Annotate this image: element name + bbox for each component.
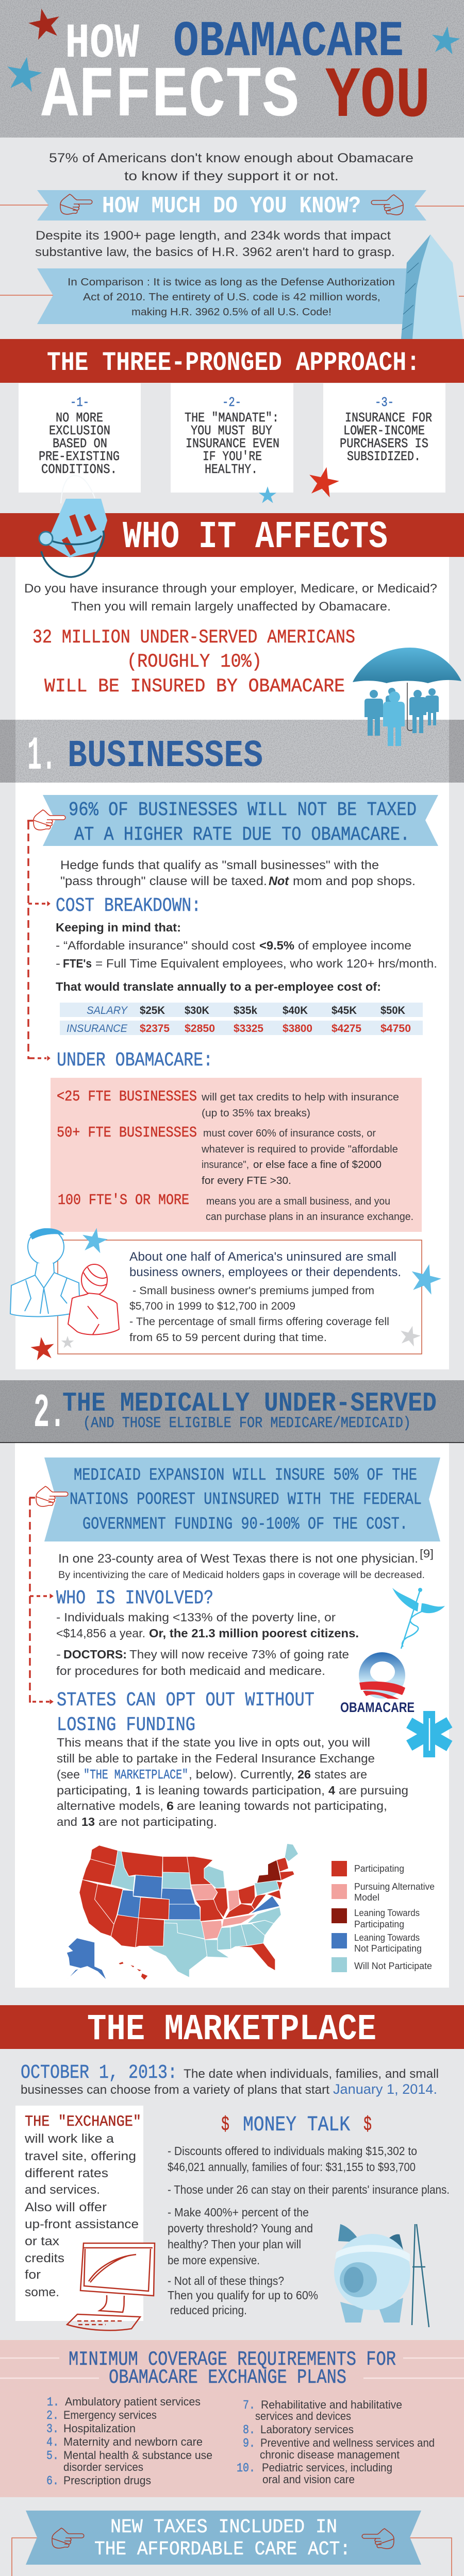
text block: who is involved: <$14,856 a year. (56, 1626, 145, 1640)
heading: money talk: $ (363, 2114, 372, 2137)
callout: 32 million (32, 627, 355, 698)
table: salary and insurance cost: $50K (380, 1005, 405, 1016)
table: salary and insurance cost: $2375 (140, 1023, 170, 1035)
heading: states can opt out: LOSING FUNDING (57, 1714, 195, 1736)
text block: who is involved: - Individuals making <133% of the poverty line, or (56, 1611, 336, 1624)
list: coverage left column: Ambulatory patient services (65, 2395, 201, 2408)
legend: map states: Leaning Towards (354, 1908, 420, 1918)
icon: sketch of businesswoman (68, 1264, 119, 1334)
icon: blue star (80, 1226, 109, 1254)
panel: prong 2 (171, 383, 293, 493)
legend: map states: Leaning Towards (354, 1933, 420, 1943)
list: coverage left column: 2. (46, 2409, 59, 2423)
text block: opt out details: 13 (81, 1815, 95, 1828)
panel: prong 3: LOWER-INCOME (343, 423, 425, 438)
icon: red star (29, 1335, 56, 1361)
band: the marketplace (0, 2005, 464, 2050)
panel: FTE rules: will get tax credits to help with insurance (201, 1092, 399, 1103)
callout: 32 million: (ROUGHLY 10%) (127, 651, 262, 673)
list: coverage right column: Pediatric services, including (262, 2461, 392, 2474)
panel: minimum coverage requirements (0, 2340, 464, 2497)
gray section: medically under-served heading: (AND THOSE ELIGIBLE FOR MEDICARE/MEDICAID) (83, 1415, 411, 1432)
heading: who is involved: WHO IS INVOLVED? (56, 1587, 213, 1609)
text block: money talk: healthy? Then your plan will (168, 2238, 301, 2251)
hero panel (0, 0, 464, 138)
text block: opt out details: and (57, 1815, 77, 1828)
icon: obamacare logo (340, 1652, 415, 1715)
list: coverage right column: 10. (237, 2462, 255, 2476)
list: coverage left column: Maternity and newborn care (63, 2435, 203, 2448)
icon: sketch computer (67, 2243, 155, 2330)
table: salary and insurance cost: $30K (185, 1005, 209, 1016)
icon: red star (306, 464, 341, 499)
panel: FTE rules: for every FTE >30. (202, 1175, 291, 1187)
text block: west texas: [9] (420, 1547, 434, 1560)
list: coverage right column: Rehabilitative and habilitative (261, 2398, 402, 2411)
icon: pointing hand left (52, 2528, 84, 2548)
text block: Then you will remain largely unaffected by Obamacare. (71, 600, 391, 614)
text block: opt out details: are pursuing (339, 1784, 408, 1797)
panel: prong 1: NO MORE (56, 410, 103, 426)
list: coverage left column: 3. (46, 2422, 59, 2436)
icon: blue star right (407, 1261, 444, 1296)
text block: hedge funds: Hedge funds that qualify as "small businesses" with the (60, 858, 379, 872)
text block: cost breakdown: FTE's (63, 957, 92, 970)
panel: prong 2: IF YOU'RE (203, 449, 262, 464)
panel: prong 3: -3- (375, 395, 394, 410)
text block: opt out details: , below). Currently, (189, 1768, 294, 1781)
text block: who is involved (56, 1611, 359, 1677)
panel: FTE rules: or else face a fine of $2000 (253, 1159, 382, 1171)
panel: prong 2: YOU MUST BUY (191, 423, 272, 438)
text block: money talk: - Discounts offered to individuals making $15,302 to (168, 2144, 417, 2158)
callout: uninsured small business: from 65 to 59 percent during that time. (129, 1332, 327, 1344)
heading: money talk: $ (221, 2114, 229, 2137)
comparison ribbon: In Comparison : It is twice as long as the Defense Authorization (68, 277, 395, 288)
table: salary and insurance cost (60, 1003, 423, 1035)
heading: MINIMUM COVERAGE REQUIREMENTS FOR (69, 2348, 396, 2371)
text block: hedge funds: Not (269, 874, 289, 888)
text block: money talk: reduced pricing. (170, 2303, 247, 2317)
text block: money talk: $46,021 annually, families of four: $31,155 to $93,700 (168, 2160, 416, 2174)
icon: pointing hand left (60, 194, 92, 214)
heading: OBAMACARE EXCHANGE PLANS (109, 2366, 346, 2389)
text block: money talk: be more expensive. (168, 2253, 260, 2267)
legend: map states: Participating (354, 1919, 404, 1929)
table: salary and insurance cost: $45K (332, 1005, 357, 1016)
text block: opt out details: are leaning towards not participating, (177, 1799, 387, 1812)
panel: the exchange: or tax (25, 2234, 59, 2248)
list: coverage right column: Preventive and wellness services and (260, 2436, 435, 2449)
text block: who is involved: for procedures for both medicaid and medicare. (56, 1664, 325, 1677)
ribbon: new taxes heading: NEW TAXES INCLUDED IN (110, 2516, 337, 2538)
panel: prong 2: THE "MANDATE": (185, 410, 279, 426)
gray section: businesses heading: BUSINESSES (68, 735, 263, 778)
panel: FTE rules: means you are a small business, and you (206, 1196, 390, 1207)
panel: the exchange: will work like a (24, 2132, 114, 2146)
table: salary and insurance cost: $3800 (283, 1023, 312, 1035)
panel: the exchange: different rates (25, 2166, 108, 2180)
text block: cost breakdown: = Full Time Equivalent employees, who work 120+ hrs/month. (95, 957, 437, 970)
panel: prong 1: EXCLUSION (49, 423, 110, 438)
text block: cost breakdown: - (56, 957, 60, 970)
ribbon: 96 percent (43, 795, 438, 846)
band: three-pronged approach (0, 339, 464, 383)
panel: prong 2: HEALTHY. (205, 462, 258, 477)
icon: stethoscope and dollar sign (39, 476, 107, 577)
table: salary and insurance cost: $35k (234, 1005, 257, 1016)
text block: bill length: Despite its 1900+ page length, and 234k words that impact (36, 229, 391, 243)
panel: prong 3: SUBSIDIZED. (347, 449, 421, 464)
list: coverage left column: Mental health & substance use (63, 2449, 212, 2462)
intro text: to know if they support it or not. (124, 169, 339, 183)
panel: prong 2: -2- (222, 395, 241, 410)
panel: the exchange: some. (25, 2285, 59, 2299)
text block: opt out details: 1 (136, 1784, 141, 1797)
text block: west texas: By incentivizing the care of Medicaid holders gaps in coverage will be decreased. (58, 1570, 425, 1581)
title: AFFECTS (41, 56, 299, 138)
text block: cost breakdown: of employee income (298, 939, 411, 952)
panel: FTE rules: 100 FTE'S OR MORE (58, 1192, 189, 1209)
callout: uninsured small business: About one half of America's uninsured are small (129, 1250, 396, 1264)
text block: opt out details: 26 (297, 1768, 311, 1781)
text block: who is involved: - (56, 1648, 61, 1661)
legend: map states: Will Not Participate (354, 1961, 432, 1971)
list: coverage left column (46, 2395, 212, 2488)
icon: obamacare logo: OBAMACARE (340, 1700, 415, 1715)
text block: opt out details: are not participating. (98, 1815, 217, 1828)
list: coverage left column: Prescription drugs (63, 2474, 151, 2487)
ribbon: new taxes heading (26, 2511, 421, 2565)
text block: who is involved: Or, the 21.3 million poorest citizens. (149, 1626, 359, 1640)
text block: money talk: - Make 400%+ percent of the (168, 2206, 309, 2219)
text block: hedge funds: "pass through" clause will be taxed. (60, 874, 267, 888)
table: salary and insurance cost: $3325 (234, 1023, 263, 1035)
ribbon: 96 percent: AT A HIGHER RATE DUE TO OBAMACARE. (74, 824, 410, 846)
list: coverage left column: 5. (46, 2449, 59, 2463)
callout: uninsured small business: business owners, employees or their dependents. (129, 1265, 401, 1279)
list: coverage right column: chronic disease management (260, 2448, 400, 2461)
text block: Do you have insurance through your employer, Medicare, or Medicaid? (24, 582, 437, 596)
panel: FTE rules: can purchase plans in an insurance exchange. (206, 1211, 413, 1223)
banner: how much do you know (0, 190, 464, 221)
legend: map states: Not Participating (354, 1943, 422, 1954)
table: salary and insurance cost: SALARY (87, 1005, 128, 1016)
text block: who is involved: They will now receive 73% of going rate (129, 1648, 349, 1661)
text block: who is involved: DOCTORS: (63, 1648, 127, 1661)
text block: opt out details (57, 1736, 408, 1828)
list: coverage right column: 9. (243, 2437, 255, 2451)
text block: opt out details: is leaning towards participation, (145, 1784, 325, 1797)
list: coverage left column: Hospitalization (63, 2422, 136, 2435)
list: coverage right column: oral and vision care (262, 2473, 355, 2486)
map: state participation (67, 1843, 299, 1980)
heading: states can opt out: STATES CAN OPT OUT WITHOUT (57, 1689, 314, 1711)
panel: the exchange: for (25, 2268, 41, 2282)
text block: opt out details: 6 (167, 1799, 174, 1812)
heading (69, 2348, 396, 2389)
panel: FTE rules: <25 FTE BUSINESSES (57, 1088, 197, 1105)
comparison ribbon: making H.R. 3962 0.5% of all U.S. Code! (131, 307, 332, 318)
callout: 32 million: 32 MILLION UNDER-SERVED AMERICANS (32, 627, 355, 649)
panel: businesses (10, 783, 449, 1369)
legend: map states (332, 1861, 435, 1972)
heading: HOW MUCH DO YOU KNOW? (102, 193, 361, 219)
callout: uninsured small business (58, 1240, 422, 1354)
text block: october 1 2013 (21, 2062, 439, 2097)
arrow: dashed connector (27, 821, 50, 1060)
text block: hedge funds: mom and pop shops. (293, 874, 416, 888)
heading: states can opt out (57, 1689, 314, 1736)
icon: small gray star (61, 1336, 74, 1348)
title (41, 14, 430, 138)
callout: 32 million: WILL BE INSURED BY OBAMACARE (44, 676, 345, 698)
text block: opt out details: still be able to partake in the Federal Insurance Exchange (57, 1752, 375, 1765)
panel: new taxes (12, 2511, 452, 2576)
text block: opt out details: states are (314, 1768, 367, 1781)
list: coverage right column: 7. (243, 2399, 255, 2413)
comparison ribbon (0, 268, 464, 324)
band: the marketplace: THE MARKETPLACE (87, 2009, 376, 2050)
list: coverage left column: disorder services (63, 2461, 143, 2473)
text block: cost breakdown: Keeping in mind that: (56, 921, 181, 934)
panel: prong 3: INSURANCE FOR (345, 410, 432, 426)
icon: blue star right (429, 24, 461, 55)
panel: prong 1: BASED ON (53, 436, 107, 451)
table: salary and insurance cost: $2850 (185, 1023, 215, 1035)
callout: uninsured small business: - Small business owner's premiums jumped from (132, 1285, 374, 1297)
arrow: dashed connector (29, 1498, 53, 1704)
intro text (49, 151, 413, 183)
panel: FTE rules (51, 1078, 422, 1232)
list: coverage left column: Emergency services (63, 2409, 157, 2421)
panel: who it affects (0, 513, 464, 720)
panel: the exchange: credits (25, 2251, 64, 2265)
text block: october 1 2013: businesses can choose from a variety of plans that start (21, 2083, 329, 2097)
panel: prong 1: -1- (70, 395, 89, 410)
text block: opt out details: (see (57, 1768, 80, 1781)
text block: money talk: Then you qualify for up to 60% (168, 2289, 318, 2302)
text block: cost breakdown: That would translate annually to a per-employee cost of: (56, 980, 381, 993)
gray section: medically under-served heading: 2. (34, 1386, 65, 1440)
callout: uninsured small business: $5,700 in 1999 to $12,700 in 2009 (129, 1300, 295, 1312)
heading: WHO IT AFFECTS (123, 516, 388, 559)
text block: west texas: In one 23-county area of West Texas there is not one physician. (58, 1552, 418, 1566)
panel: the exchange: up-front assistance (25, 2217, 139, 2231)
text block: opt out details: 4 (328, 1784, 335, 1797)
panel: FTE rules: (up to 35% tax breaks) (202, 1108, 310, 1119)
panel: the exchange: Also will offer (25, 2200, 107, 2214)
panel: FTE rules: 50+ FTE BUSINESSES (57, 1124, 197, 1141)
ribbon: medicaid expansion (44, 1458, 440, 1541)
text block: opt out details: alternative models, (57, 1799, 163, 1812)
callout: uninsured small business: - The percentage of small firms offering coverage fell (129, 1316, 389, 1328)
heading: money talk: MONEY TALK (243, 2113, 350, 2137)
panel: prong 1: CONDITIONS. (41, 462, 117, 477)
panel: the exchange: THE "EXCHANGE" (25, 2113, 141, 2131)
icon: pointing hand right (362, 2529, 394, 2549)
icon: gray star (398, 1324, 422, 1347)
text block: october 1 2013: The date when individuals, families, and small (184, 2067, 439, 2081)
title: HOW (65, 16, 139, 72)
text block: bill length: substantive law, the basics of H.R. 3962 aren't hard to grasp. (35, 245, 395, 259)
gray section: medically under-served heading (0, 1380, 464, 1443)
title: OBAMACARE (173, 14, 404, 71)
icon: blue star left (4, 54, 44, 93)
text block: cost breakdown (56, 921, 437, 993)
text block: west texas (58, 1547, 434, 1581)
table: salary and insurance cost: $4750 (380, 1023, 411, 1035)
intro text: 57% of Americans don't know enough about Obamacare (49, 151, 413, 165)
table: salary and insurance cost: $4275 (332, 1023, 361, 1035)
text block: october 1 2013: January 1, 2014. (333, 2081, 437, 2097)
comparison ribbon: Act of 2010. The entirety of U.S. code is 42 million words, (83, 292, 380, 303)
text block: money talk: - Not all of these things? (168, 2274, 284, 2287)
legend: map states: Participating (354, 1863, 404, 1874)
text block: money talk: poverty threshold? Young and (168, 2222, 313, 2235)
text block: bill length (35, 229, 395, 259)
text block: cost breakdown: <9.5% (259, 939, 294, 952)
text block: october 1 2013: OCTOBER 1, 2013: (21, 2062, 177, 2084)
list: coverage left column: 6. (46, 2475, 59, 2488)
panel: FTE rules: whatever is required to provide "affordable (201, 1144, 398, 1155)
heading: under obamacare: UNDER OBAMACARE: (57, 1049, 213, 1072)
panel: prong 1 (19, 383, 141, 493)
panel: prong 2: INSURANCE EVEN (186, 436, 279, 451)
text block: opt out details: participating, (57, 1784, 131, 1797)
legend: map states: Pursuing Alternative (354, 1882, 435, 1892)
text block (24, 582, 437, 614)
panel: FTE rules: must cover 60% of insurance costs, or (203, 1128, 376, 1139)
icon: sketch of businessman (10, 1229, 80, 1316)
list: coverage right column: services and devices (255, 2410, 351, 2422)
list: coverage left column: 1. (47, 2396, 59, 2410)
title: YOU (325, 56, 430, 138)
icon: paper stack (401, 234, 463, 339)
panel: prong 3 (323, 383, 445, 493)
icon: star of life (406, 1711, 452, 1757)
panel: the exchange: travel site, offering (25, 2149, 136, 2163)
icon: small blue star (259, 486, 276, 503)
icon: red star (26, 5, 63, 41)
icon: pointing hand right (371, 195, 403, 215)
icon: caduceus (392, 1588, 445, 1649)
panel: prong 1: PRE-EXISTING (39, 449, 120, 464)
text block: opt out details: "THE MARKETPLACE" (84, 1767, 188, 1783)
text block: opt out details: This means that if the state you live in opts out, you will (57, 1736, 370, 1749)
icon: pointing hand (36, 1486, 68, 1506)
panel: medically under-served (15, 1443, 452, 1988)
list: coverage right column: 8. (243, 2424, 255, 2437)
list: coverage right column (237, 2398, 435, 2486)
icon: bandaged piggy bank with crutch (334, 2224, 429, 2327)
panel: FTE rules: insurance", (202, 1159, 249, 1171)
list: coverage right column: Laboratory services (260, 2423, 354, 2436)
gray section: businesses heading: 1. (27, 729, 56, 783)
icon: pointing hand (34, 810, 65, 830)
text block: cost breakdown: - “Affordable insurance" should cost (56, 939, 256, 952)
list: coverage left column: 4. (46, 2436, 59, 2450)
panel: the exchange (15, 2106, 143, 2321)
heading: cost breakdown: COST BREAKDOWN: (56, 895, 201, 917)
gray section: businesses heading (0, 720, 464, 783)
icon: umbrella with people (353, 648, 461, 746)
text block: hedge funds (60, 858, 416, 888)
table: salary and insurance cost: $25K (140, 1005, 165, 1016)
table: salary and insurance cost: INSURANCE (67, 1023, 128, 1035)
panel: prong 3: PURCHASERS IS (340, 436, 428, 451)
panel: the exchange: and services. (25, 2183, 100, 2197)
text block: money talk (168, 2144, 450, 2317)
ribbon: new taxes heading: THE AFFORDABLE CARE ACT: (94, 2538, 351, 2561)
table: salary and insurance cost: $40K (283, 1005, 308, 1016)
legend: map states: Model (354, 1892, 379, 1903)
